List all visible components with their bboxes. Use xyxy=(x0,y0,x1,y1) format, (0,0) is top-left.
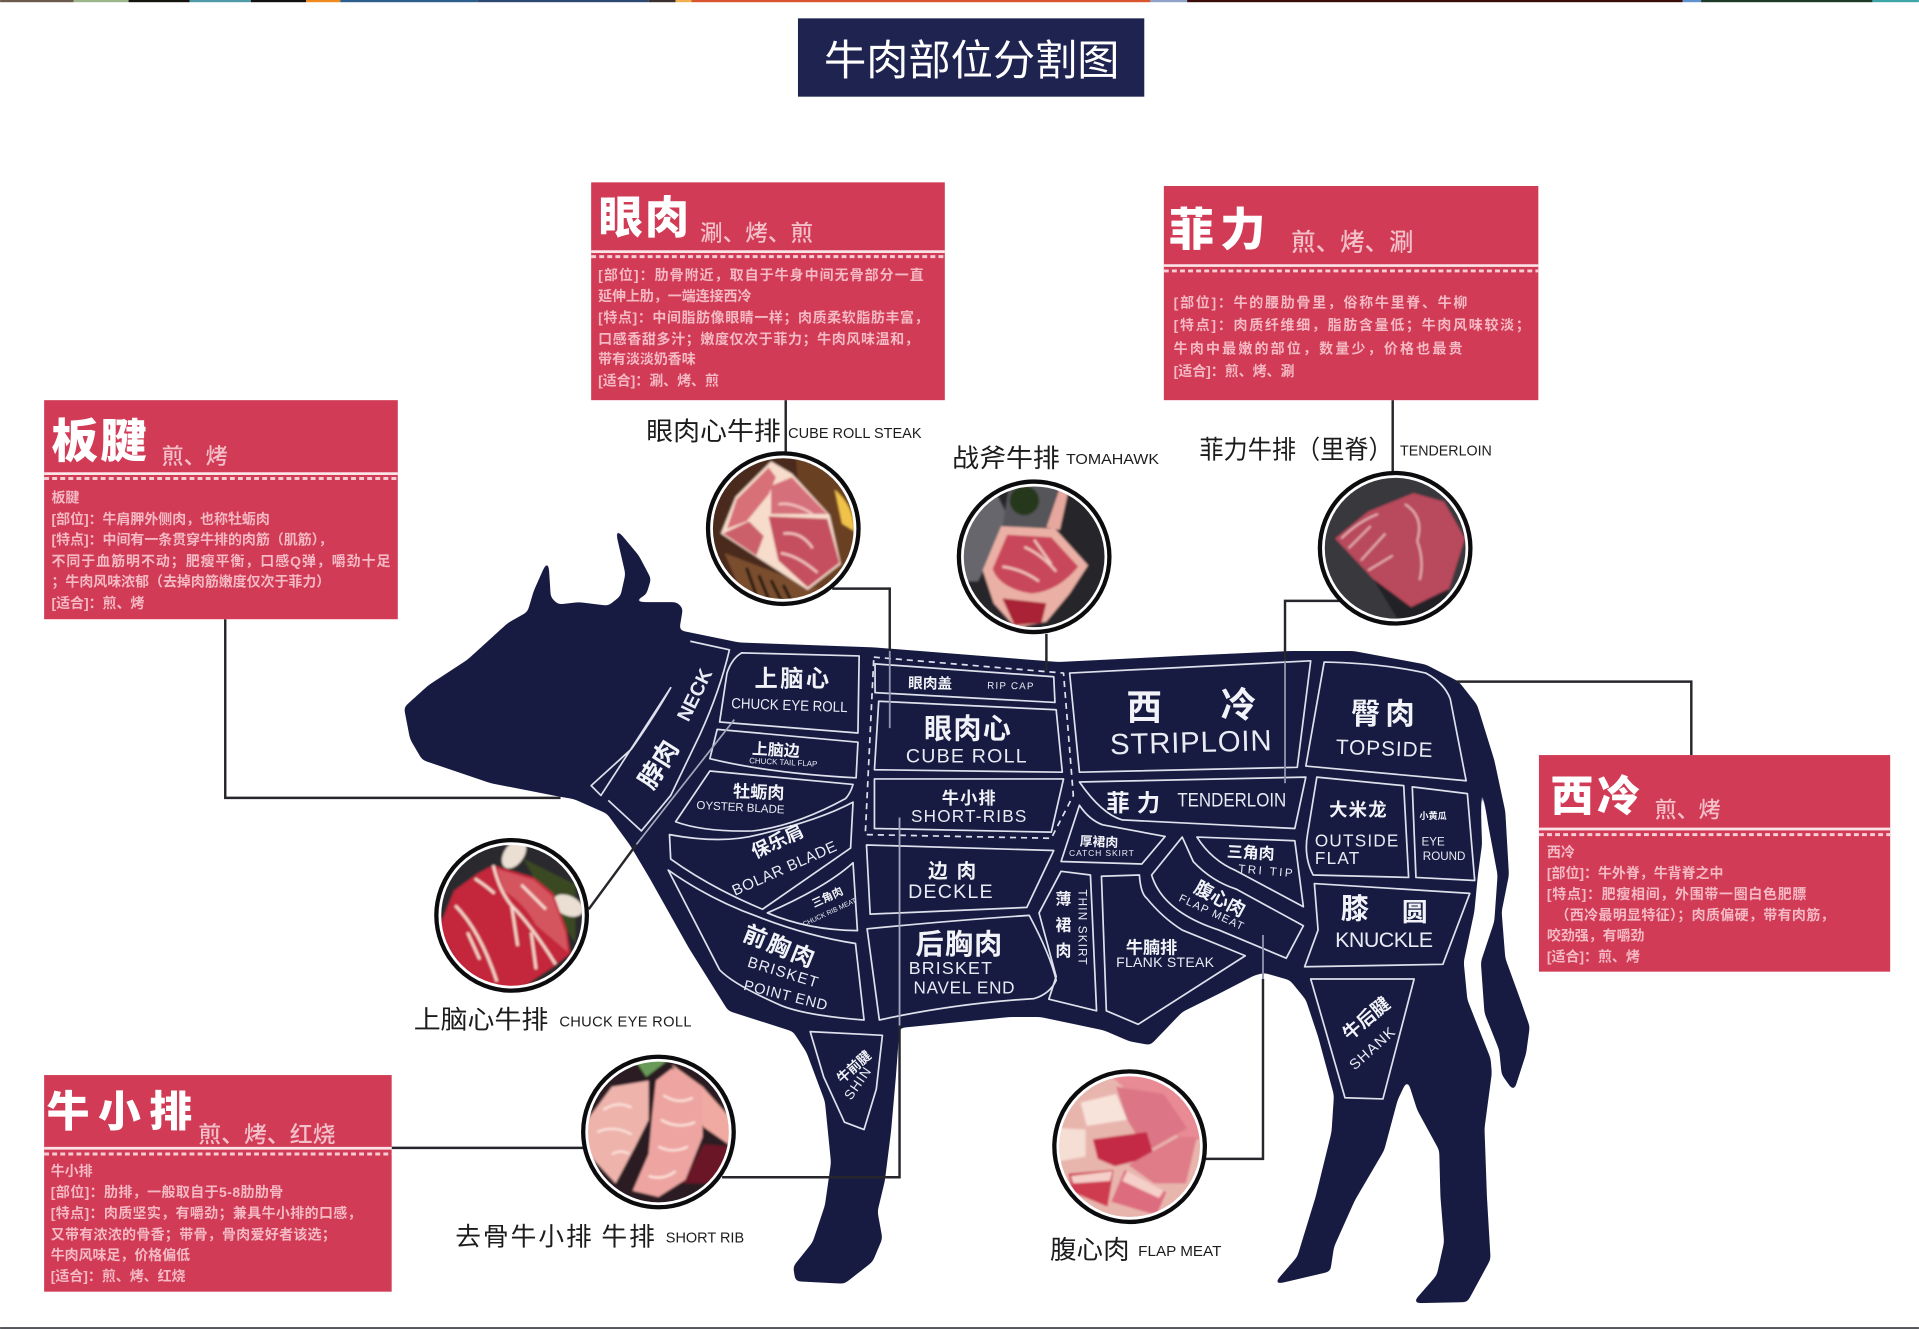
icon: tomahawk photo xyxy=(958,481,1110,633)
description: [适合]：煎、烤、红烧 xyxy=(51,1268,186,1284)
description: [部位]：牛的腰肋骨里，俗称牛里脊、牛柳 xyxy=(1174,294,1467,310)
description: 延伸上肋，一端连接西冷 xyxy=(598,288,751,304)
cow silhouette xyxy=(404,526,1530,1303)
caption: short rib: 去骨牛小排 牛排 xyxy=(455,1216,655,1253)
cow labels xyxy=(628,660,1465,1103)
caption: chuck eye roll: 上脑心牛排 xyxy=(414,1000,548,1037)
icon: cube roll steak photo xyxy=(707,453,859,605)
description: [适合]：煎、烤 xyxy=(1547,949,1640,965)
label: outside flat: FLAT xyxy=(1315,848,1360,868)
connector: chuck circle to cow xyxy=(589,720,734,909)
cooking methods: 煎、烤 xyxy=(162,439,228,471)
label: cube roll xyxy=(906,706,1028,767)
label: eye round: EYE xyxy=(1421,835,1445,848)
label: topside xyxy=(1335,691,1433,762)
label: deckle: DECKLE xyxy=(908,881,994,903)
connector: ribeye panel to caption xyxy=(785,400,787,455)
connector: flap meat circle to cow xyxy=(1205,935,1263,1159)
label: flap meat: 腹心肉 xyxy=(1190,874,1251,923)
description: [特点]：中间有一条贯穿牛排的肉筋（肌筋）， xyxy=(51,532,333,548)
label: chuck tail flap xyxy=(749,736,818,769)
description: [特点]：肥瘦相间，外围带一圈白色肥膘 xyxy=(1547,886,1806,902)
label: thin skirt: 薄 xyxy=(1056,887,1072,910)
label: brisket navel end: NAVEL END xyxy=(914,978,1015,998)
label: thin skirt xyxy=(1056,887,1088,966)
label: topside: TOPSIDE xyxy=(1335,736,1433,762)
label: eye round: ROUND xyxy=(1423,850,1465,863)
heading: 菲力 xyxy=(1169,193,1272,259)
description: [部位]：肋骨附近，取自于牛身中间无骨部分一直 xyxy=(598,267,924,283)
label: shin: SHIN xyxy=(841,1064,875,1103)
label: shank: 牛后腱 xyxy=(1336,991,1395,1046)
description: （西冷最明显特征）；肉质偏硬，带有肉筋， xyxy=(1555,907,1834,924)
description: 牛肉风味足，价格偏低 xyxy=(51,1247,190,1263)
label: flank steak: 牛腩排 xyxy=(1126,933,1177,958)
connector: tomahawk circle to cow xyxy=(1045,634,1047,671)
label: striploin xyxy=(1110,677,1272,761)
caption: short rib: SHORT RIB xyxy=(666,1230,744,1246)
label: brisket point end: 前胸肉 xyxy=(739,915,823,975)
label: eye round xyxy=(1419,808,1465,863)
label: cube roll: 眼肉心 xyxy=(924,706,1012,747)
icon: short rib photo xyxy=(583,1056,734,1208)
description: 板腱 xyxy=(51,489,79,505)
label: rip cap: 眼肉盖 xyxy=(908,672,953,694)
label: chuck eye roll xyxy=(731,660,848,716)
label: catch skirt xyxy=(1069,831,1135,858)
title: 牛肉部位分割图 xyxy=(824,27,1119,88)
connector: tenderloin panel to circle xyxy=(1392,400,1394,471)
caption: cube roll steak: 眼肉心牛排 xyxy=(646,411,781,448)
label: knuckle: 膝 xyxy=(1341,886,1369,927)
description: [部位]：牛外脊，牛背脊之中 xyxy=(1547,865,1723,881)
caption: cube roll steak xyxy=(646,411,922,448)
label: thin skirt: 裙 xyxy=(1056,912,1072,935)
description: [适合]：煎、烤、涮 xyxy=(1174,363,1295,379)
description: [特点]：中间脂肪像眼睛一样；肉质柔软脂肪丰富， xyxy=(598,310,929,327)
label: rip cap: RIP CAP xyxy=(987,681,1035,692)
label: outside flat: OUTSIDE xyxy=(1315,831,1400,851)
label: brisket point end xyxy=(739,915,829,1014)
label: brisket navel end: BRISKET xyxy=(909,958,993,978)
caption: chuck eye roll xyxy=(414,1000,691,1037)
heading: 眼肉 xyxy=(598,182,691,246)
label: rip cap xyxy=(908,672,1035,694)
panel: 板腱 flank xyxy=(44,400,398,619)
label: oyster blade: 牡蛎肉 xyxy=(733,777,785,804)
connector: flank panel to cow xyxy=(225,619,561,798)
description: [适合]：涮、烤、煎 xyxy=(598,373,719,389)
description: 口感香甜多汁；嫩度仅次于菲力；牛肉风味温和， xyxy=(598,331,919,348)
heading: 板腱 xyxy=(51,405,149,472)
label: bolar blade: 保乐肩 xyxy=(747,817,808,864)
label: striploin: STRIPLOIN xyxy=(1110,724,1272,761)
label: tri tip: 三角肉 xyxy=(1226,839,1275,864)
icon: tenderloin photo xyxy=(1319,472,1471,624)
label: chuck tail flap: 上脑边 xyxy=(752,736,800,762)
label: chuck eye roll: CHUCK EYE ROLL xyxy=(731,696,848,716)
label: tenderloin: TENDERLOIN xyxy=(1177,790,1286,811)
caption: cube roll steak: CUBE ROLL STEAK xyxy=(788,426,922,442)
label: tri tip: TRI TIP xyxy=(1238,862,1296,880)
label: catch skirt: 厚裙肉 xyxy=(1079,831,1119,851)
connector: striploin panel to cow xyxy=(1456,682,1691,755)
label: thin skirt: 肉 xyxy=(1056,938,1071,961)
cut outlines xyxy=(591,641,1475,1130)
description xyxy=(51,1163,362,1284)
label: brisket navel end xyxy=(909,922,1015,998)
cooking methods: 煎、烤、红烧 xyxy=(198,1116,336,1150)
label: brisket point end: POINT END xyxy=(742,978,829,1014)
description: 带有淡淡奶香味 xyxy=(598,351,696,367)
label: catch skirt: CATCH SKIRT xyxy=(1069,848,1135,858)
cooking methods: 煎、烤 xyxy=(1655,792,1721,824)
label: knuckle: KNUCKLE xyxy=(1335,928,1433,952)
label: shank xyxy=(1336,991,1400,1074)
label: chuck rib meat: CHUCK RIB MEAT xyxy=(802,897,858,928)
description: 又带有浓浓的骨香；带骨，骨肉爱好者该选； xyxy=(51,1226,336,1243)
label: flank steak: FLANK STEAK xyxy=(1116,954,1215,970)
description xyxy=(51,489,391,611)
label: striploin: 西 xyxy=(1127,679,1162,730)
label: short ribs: 牛小排 xyxy=(942,784,997,809)
caption: tomahawk xyxy=(952,438,1159,475)
label: shank: SHANK xyxy=(1347,1024,1400,1074)
caption: tomahawk: TOMAHAWK xyxy=(1066,452,1159,468)
panel: 西冷 striploin xyxy=(1539,755,1890,972)
label: knuckle: 圆 xyxy=(1402,892,1428,929)
caption: flap meat xyxy=(1050,1230,1221,1267)
description: [特点]：肉质坚实，有嚼劲；兼具牛小排的口感， xyxy=(51,1205,362,1222)
label: brisket navel end: 后胸肉 xyxy=(915,922,1004,963)
description: [适合]：煎、烤 xyxy=(51,595,144,611)
label: flank steak xyxy=(1116,933,1215,970)
title xyxy=(798,18,1144,97)
label: flap meat: FLAP MEAT xyxy=(1177,892,1246,933)
description: [部位]：牛肩胛外侧肉，也称牡蛎肉 xyxy=(51,511,270,527)
label: flap meat xyxy=(1177,874,1251,933)
label: outside flat: 大米龙 xyxy=(1329,796,1388,822)
label: shin: 牛前腱 xyxy=(831,1045,875,1087)
connector: cube roll circle to cow xyxy=(832,589,890,728)
caption: flap meat: 腹心肉 xyxy=(1050,1230,1130,1267)
description: ；牛肉风味浓郁（去掉肉筋嫩度仅次于菲力） xyxy=(51,574,330,591)
label: brisket point end: BRISKET xyxy=(745,954,821,992)
label: thin skirt: THIN SKIRT xyxy=(1075,889,1088,966)
description: 牛小排 xyxy=(51,1163,93,1179)
top edge colour strip xyxy=(0,0,1919,2)
cooking methods: 涮、烤、煎 xyxy=(700,215,813,248)
heading: 西冷 xyxy=(1551,762,1644,824)
label: chuck rib meat xyxy=(802,883,858,928)
caption: flap meat: FLAP MEAT xyxy=(1138,1244,1221,1260)
label: oyster blade: OYSTER BLADE xyxy=(696,799,785,816)
label: tenderloin: 菲力 xyxy=(1106,784,1168,818)
label: eye round: 小黄瓜 xyxy=(1419,808,1447,822)
label: tenderloin xyxy=(1106,784,1286,818)
caption: short rib xyxy=(455,1216,744,1253)
connector: short rib panel to circle xyxy=(392,1147,585,1149)
cooking methods: 煎、烤、涮 xyxy=(1291,224,1413,259)
icon: flap meat photo xyxy=(1054,1071,1205,1223)
caption: chuck eye roll: CHUCK EYE ROLL xyxy=(559,1014,691,1030)
caption: tenderloin: TENDERLOIN xyxy=(1400,444,1492,460)
description: [特点]：肉质纤维细，脂肪含量低；牛肉风味较淡； xyxy=(1174,317,1530,334)
panel: 眼肉 ribeye xyxy=(591,182,945,400)
description xyxy=(598,267,929,389)
label: neck: 脖肉 xyxy=(628,732,687,795)
label: neck: NECK xyxy=(673,665,717,725)
label: topside: 臀肉 xyxy=(1351,691,1420,733)
label: striploin: 冷 xyxy=(1221,677,1256,728)
label: bolar blade: BOLAR BLADE xyxy=(730,838,839,900)
description xyxy=(1174,294,1530,379)
panel: 牛小排 short rib xyxy=(44,1075,392,1292)
icon: chuck eye roll photo xyxy=(436,836,587,991)
label: deckle: 边 肉 xyxy=(928,854,976,883)
caption: tenderloin: 菲力牛排（里脊） xyxy=(1199,429,1393,466)
label: tri tip xyxy=(1226,839,1296,880)
label: short ribs xyxy=(911,784,1028,826)
description: [部位]：肋排，一般取自于5-8肋肋骨 xyxy=(51,1184,283,1200)
label: chuck rib meat: 三角肉 xyxy=(809,883,846,911)
description: 咬劲强，有嚼劲 xyxy=(1547,928,1645,944)
description: 西冷 xyxy=(1547,844,1575,860)
label: outside flat xyxy=(1315,796,1400,868)
label: knuckle xyxy=(1335,886,1433,952)
description: 牛肉中最嫩的部位，数量少，价格也最贵 xyxy=(1174,340,1463,356)
label: cube roll: CUBE ROLL xyxy=(906,745,1028,767)
description xyxy=(1547,844,1834,965)
panel: 菲力 tenderloin xyxy=(1164,186,1538,400)
description: 不同于血筋明不动；肥瘦平衡，口感Q弹，嚼劲十足 xyxy=(51,553,391,570)
heading: 牛小排 xyxy=(47,1078,201,1140)
label: oyster blade xyxy=(696,777,785,816)
label: neck xyxy=(628,665,717,795)
label: deckle xyxy=(908,854,994,903)
caption: tomahawk: 战斧牛排 xyxy=(952,438,1060,475)
label: chuck tail flap: CHUCK TAIL FLAP xyxy=(749,756,818,769)
label: short ribs: SHORT-RIBS xyxy=(911,806,1028,826)
label: chuck eye roll: 上脑心 xyxy=(755,660,832,694)
connector: tenderloin circle to cow xyxy=(1285,601,1346,783)
connector: short rib circle to cow xyxy=(722,817,900,1177)
